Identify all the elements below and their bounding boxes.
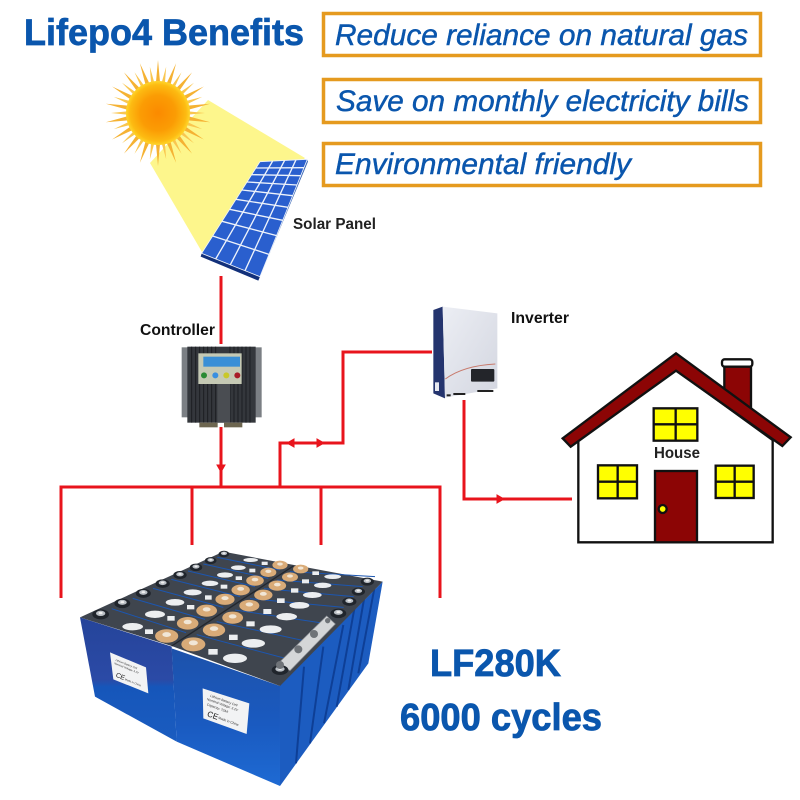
top window	[654, 408, 697, 441]
roof	[563, 353, 791, 447]
icon: solar panel	[201, 159, 308, 281]
heading: cycles: 6000 cycles	[400, 697, 602, 739]
right face	[172, 648, 280, 786]
top face	[80, 552, 383, 686]
icon: inverter	[433, 307, 497, 398]
vents	[122, 558, 341, 663]
right cell label: Nominal Voltage: 3.2V	[206, 697, 239, 712]
copper terminals	[155, 561, 308, 651]
door	[655, 471, 697, 542]
bus bar	[272, 616, 335, 675]
left cell label: Lithium Battery Cell	[115, 658, 138, 670]
left cell label: CE	[115, 672, 126, 682]
title: Lifepo4 Benefits	[24, 12, 304, 53]
icon: controller	[182, 347, 262, 427]
right cell label: CE	[206, 709, 219, 722]
right cell label	[203, 688, 249, 734]
battery pack	[80, 551, 383, 786]
label: house: House	[654, 445, 700, 462]
callout: save on bills: Save on monthly electricity bills	[336, 85, 749, 118]
callout: environmental friendly: Environmental friendly	[335, 148, 633, 181]
sunlight beam	[150, 100, 305, 252]
label: inverter: Inverter	[511, 310, 569, 327]
left cell label	[110, 652, 148, 693]
icon: house	[563, 353, 791, 542]
house walls	[578, 370, 773, 542]
right cell label: Capacity: 72Ah	[206, 703, 229, 714]
right window	[716, 466, 754, 498]
left face	[80, 617, 177, 742]
right cell label: Made in China	[218, 716, 239, 727]
heading: model: LF280K	[430, 643, 562, 685]
icon: sun	[105, 60, 211, 166]
callout: environmental friendly	[324, 144, 760, 186]
side faces	[280, 582, 383, 786]
terminals	[92, 551, 374, 619]
label: solar panel: Solar Panel	[293, 216, 376, 233]
chimney	[722, 359, 752, 413]
label: controller: Controller	[140, 322, 215, 339]
right cell label: Lithium Battery Cell	[210, 694, 238, 708]
left window	[598, 465, 637, 498]
red wiring	[61, 276, 572, 598]
left cell label: Nominal Voltage: 3.2V	[114, 661, 140, 675]
left cell label: Made in China	[124, 677, 142, 688]
callout: reduce reliance: Reduce reliance on natural gas	[335, 19, 748, 52]
